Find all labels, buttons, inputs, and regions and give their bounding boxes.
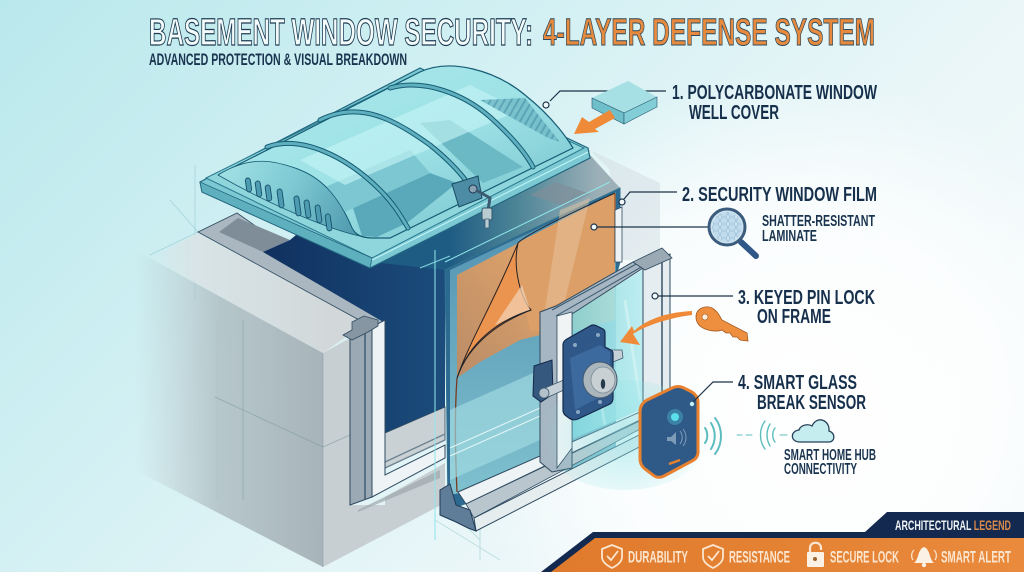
illustration: front glass and frame	[540, 248, 672, 472]
label 3: ON FRAME	[757, 306, 831, 328]
sublabel: smart home hub connectivity	[784, 447, 876, 478]
icon: magnifying glass	[709, 209, 756, 256]
callout 1: polycarbonate window well cover	[543, 81, 877, 134]
illustration: glowing guide line	[420, 250, 450, 540]
legend: resistance: RESISTANCE	[729, 548, 790, 566]
illustration: security window film pane	[445, 188, 622, 510]
label 1: WELL COVER	[689, 102, 779, 124]
film: orange sheet	[457, 193, 615, 378]
legend: secure lock	[807, 543, 899, 567]
cover ribs	[267, 85, 533, 228]
illustration: wall behind window	[590, 150, 660, 260]
callout 4: smart glass break sensor	[640, 372, 876, 478]
legend: durability	[602, 545, 688, 568]
window frame	[372, 320, 445, 497]
legend: smart alert	[912, 547, 1011, 567]
subtitle: ADVANCED PROTECTION & VISUAL BREAKDOWN	[149, 51, 407, 69]
sublabel: smart home hub connectivity: SMART HOME HUB	[784, 447, 876, 464]
arrow: into cover	[574, 110, 615, 134]
icon: sensor device	[640, 386, 698, 477]
illustration: recess under the cover	[372, 155, 620, 270]
title: BASEMENT WINDOW SECURITY:	[149, 12, 533, 54]
concrete left face	[135, 250, 323, 567]
sublabel: smart home hub connectivity: CONNECTIVITY	[784, 461, 857, 478]
legend: secure lock: SECURE LOCK	[830, 548, 899, 566]
callout 3: keyed pin lock	[620, 287, 875, 345]
dark well opening	[263, 190, 460, 433]
legend: resistance	[703, 545, 790, 568]
callout 2: security window film	[591, 184, 877, 256]
concrete top ledge	[150, 233, 372, 353]
panel: architectural legend	[541, 512, 1024, 572]
label 1: 1. POLYCARBONATE WINDOW	[672, 82, 877, 104]
concrete front corner face	[323, 338, 445, 567]
icon: signal waves	[705, 418, 787, 454]
cover dome	[218, 66, 573, 238]
label 4: BREAK SENSOR	[757, 392, 866, 414]
illustration: polycarbonate window well cover	[200, 66, 590, 268]
icon: polycarbonate sample block	[592, 81, 657, 124]
dome front end cap	[218, 161, 372, 238]
illustration: keyed pin lock	[533, 325, 623, 420]
label 4: 4. SMART GLASS	[738, 372, 857, 394]
cover vent slots	[245, 178, 332, 231]
sublabel: shatter-resistant laminate	[762, 213, 875, 245]
label 3: 3. KEYED PIN LOCK	[738, 287, 875, 309]
illustration: window sill	[440, 412, 645, 531]
icon: cloud	[792, 420, 834, 442]
icon: orange key	[696, 307, 748, 341]
dome panels	[353, 173, 457, 237]
legend: durability: DURABILITY	[628, 548, 688, 566]
cover flange	[200, 68, 590, 268]
label 1	[672, 82, 877, 124]
label 4	[738, 372, 866, 414]
illustration: glass glow	[540, 380, 710, 490]
cover padlock	[452, 176, 492, 228]
illustration: concrete window well wall	[135, 190, 460, 567]
label 2: 2. SECURITY WINDOW FILM	[682, 184, 877, 206]
sublabel: shatter-resistant laminate: SHATTER-RESISTANT	[762, 213, 875, 230]
arrow: curved toward lock	[620, 311, 692, 345]
sublabel: shatter-resistant laminate: LAMINATE	[762, 228, 817, 245]
label 3	[738, 287, 875, 328]
